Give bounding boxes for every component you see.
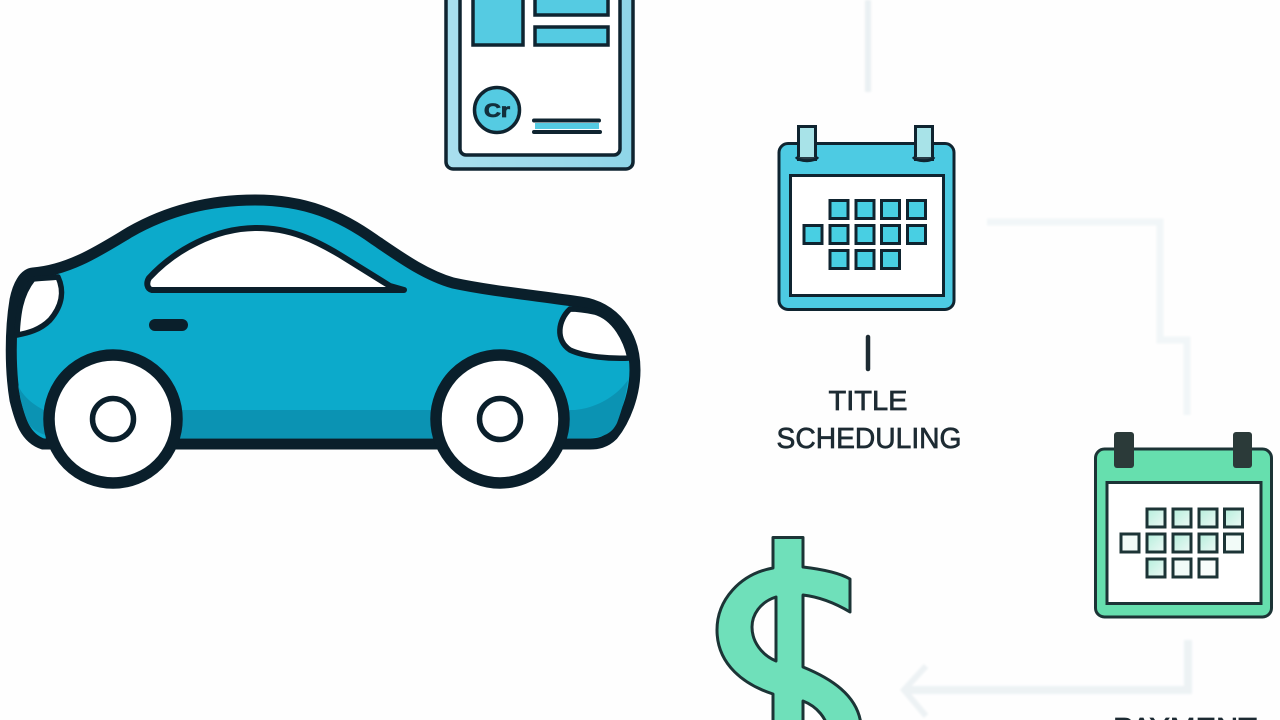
front headlight	[560, 309, 630, 358]
icon: document: Cr	[484, 101, 511, 122]
arrow: payment calendar to dollar sign	[904, 640, 1188, 716]
front wheel	[436, 355, 564, 483]
car door handle	[149, 319, 188, 331]
rear wheel	[49, 355, 177, 483]
arrow: from above to title scheduling	[865, 0, 871, 92]
label: title scheduling: SCHEDULING	[776, 423, 962, 455]
icon: car	[11, 200, 635, 483]
label: title scheduling: TITLE	[828, 385, 908, 416]
icon: blue calendar	[779, 126, 954, 310]
arrow: title scheduling to payment calendar	[987, 222, 1187, 415]
label: title scheduling	[776, 385, 962, 455]
icon: green calendar	[1096, 432, 1272, 617]
car body	[11, 200, 635, 444]
car lower shading	[18, 380, 628, 438]
car side window	[147, 228, 404, 290]
rear headlight	[17, 277, 62, 335]
icon: document	[446, 0, 633, 169]
connector below blue calendar	[866, 337, 870, 369]
icon: dollar sign	[717, 538, 861, 720]
